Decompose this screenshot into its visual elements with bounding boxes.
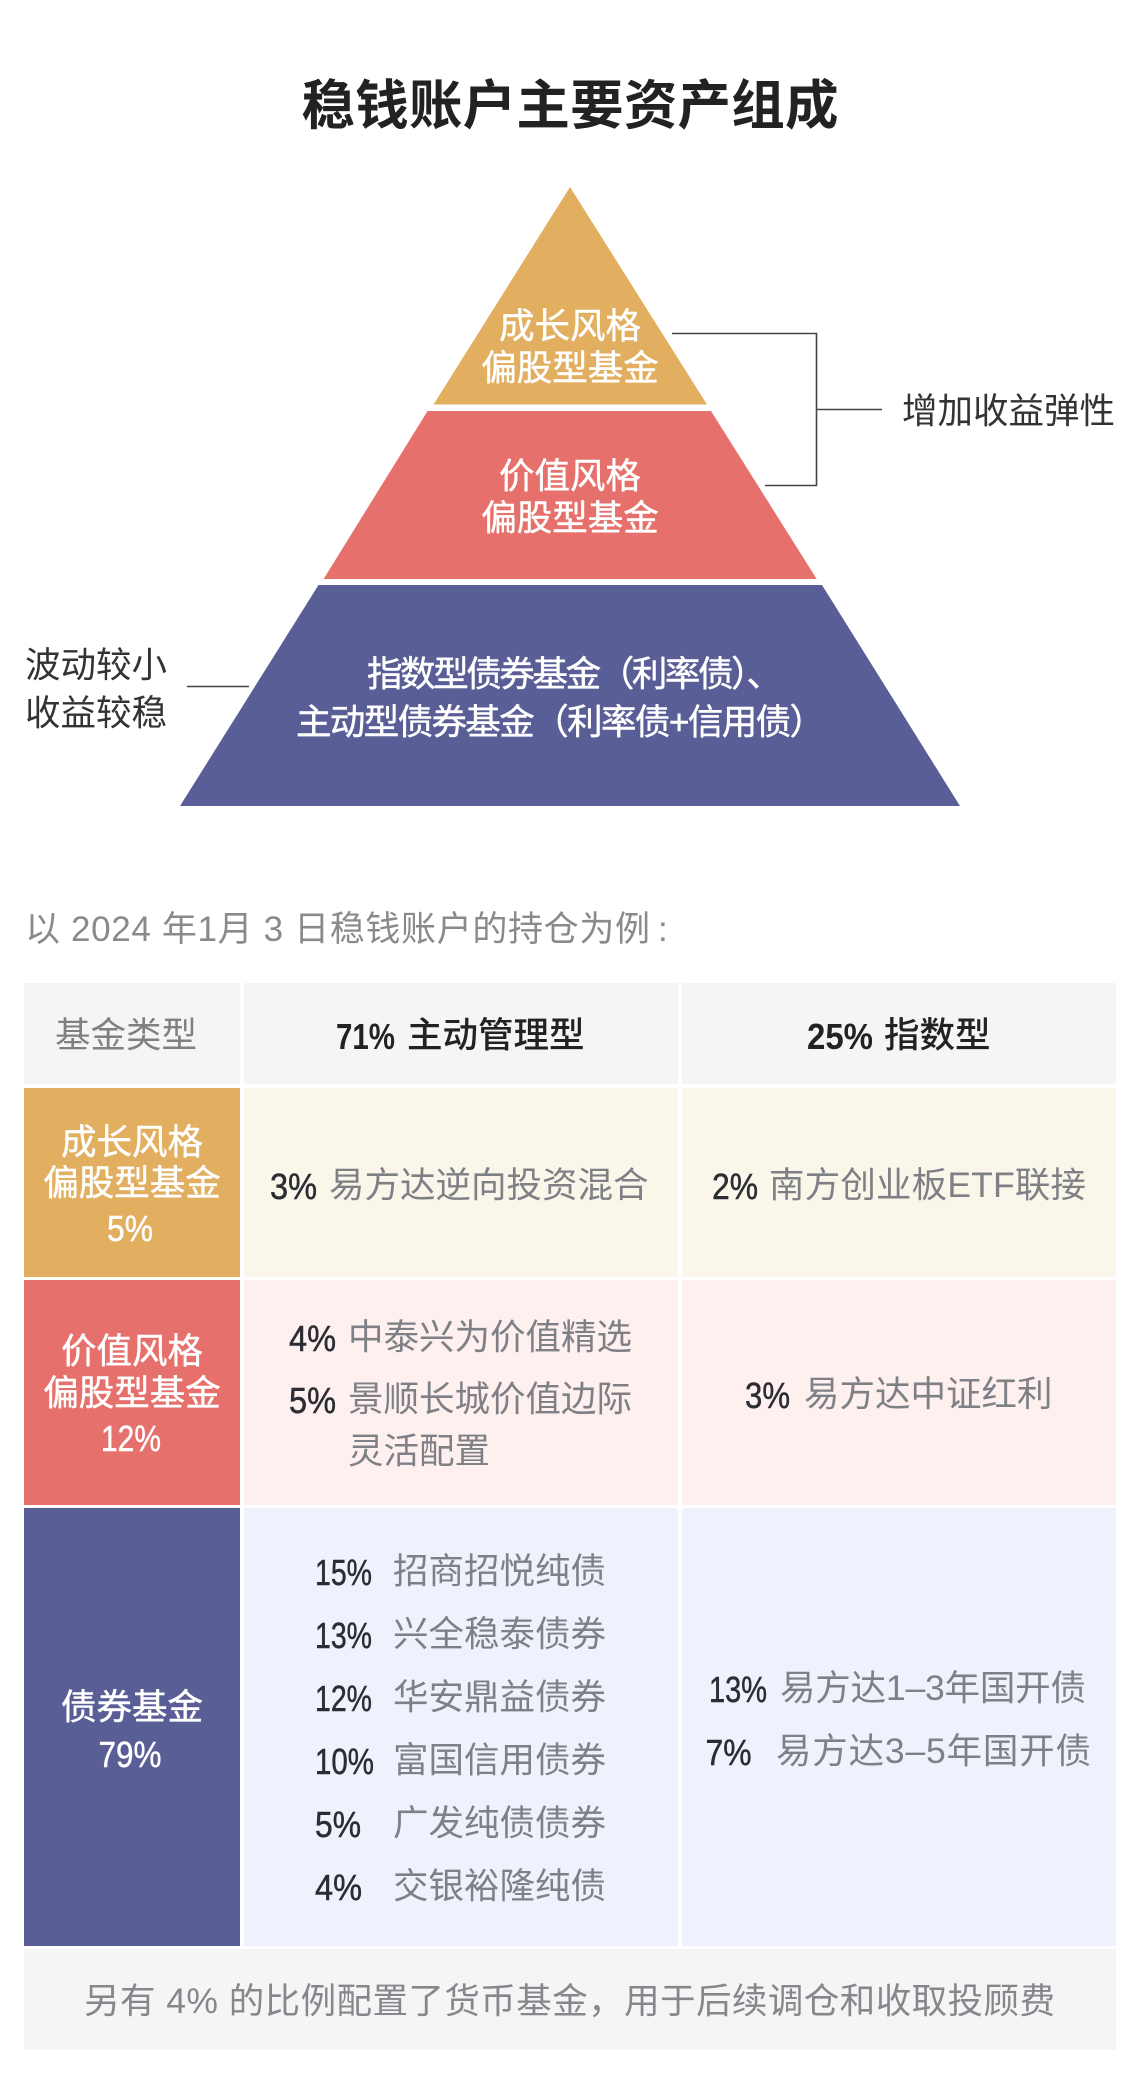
title: 稳钱账户主要资产组成 (302, 77, 838, 136)
row: value equity funds: 灵活配置 (348, 1431, 490, 1471)
row: value equity funds: 偏股型基金 (43, 1373, 221, 1413)
holdings table (24, 983, 1116, 2050)
callout: adds return elasticity (672, 334, 1115, 486)
pyramid chart (180, 187, 960, 806)
pyramid tier: growth equity funds: 成长风格 (499, 306, 641, 346)
row: bond funds: 易方达1–3年国开债 (780, 1668, 1086, 1708)
row: bond funds: 7% (706, 1732, 752, 1773)
row: growth equity funds: 偏股型基金 (43, 1163, 221, 1203)
row: bond funds: 广发纯债债券 (393, 1803, 606, 1843)
row: value equity funds: 12% (101, 1418, 161, 1459)
callout: lower volatility, steadier returns (25, 645, 249, 733)
row: bond funds (24, 1508, 1116, 1946)
callout: adds return elasticity: 增加收益弹性 (902, 391, 1115, 431)
row: value equity funds (24, 1280, 1116, 1505)
pyramid tier: growth equity funds: 偏股型基金 (481, 348, 659, 388)
table header row: 71% (336, 1016, 395, 1057)
callout: lower volatility, steadier returns: 收益较稳 (25, 693, 167, 733)
row: growth equity funds: 成长风格 (61, 1122, 203, 1162)
pyramid tier: growth equity funds (434, 187, 707, 404)
table header row: 基金类型 (55, 1015, 197, 1055)
row: bond funds: 兴全稳泰债券 (393, 1614, 606, 1654)
footer note: 另有 4% 的比例配置了货币基金，用于后续调仓和收取投顾费 (84, 1981, 1055, 2021)
footer note (24, 1949, 1116, 2050)
row: growth equity funds (24, 1088, 1116, 1277)
row: growth equity funds: 3% (270, 1166, 317, 1207)
row: bond funds: 13% (315, 1615, 372, 1656)
row: bond funds: 易方达3–5年国开债 (776, 1731, 1091, 1771)
table header row (24, 983, 1116, 1084)
table header row: 25% (807, 1016, 873, 1057)
row: bond funds: 华安鼎益债券 (393, 1677, 606, 1717)
row: value equity funds: 3% (745, 1375, 790, 1416)
subtitle: 以 2024 年1月 3 日稳钱账户的持仓为例 (25, 910, 650, 949)
row: bond funds: 招商招悦纯债 (393, 1551, 606, 1591)
row: bond funds: 12% (315, 1678, 372, 1719)
row: value equity funds: 5% (289, 1380, 336, 1421)
row: bond funds: 交银裕隆纯债 (393, 1866, 606, 1906)
pyramid tier: value equity funds (324, 411, 817, 579)
row: value equity funds: 景顺长城价值边际 (348, 1379, 632, 1419)
subtitle: : (658, 910, 668, 949)
row: bond funds: 79% (98, 1734, 162, 1775)
pyramid tier: bond funds: 指数型债券基金（利率债）、 (367, 654, 782, 694)
row: bond funds: 债券基金 (61, 1687, 203, 1727)
row: growth equity funds: 南方创业板ETF联接 (769, 1165, 1086, 1205)
row: value equity funds: 易方达中证红利 (804, 1374, 1053, 1414)
row: bond funds: 4% (315, 1867, 362, 1908)
row: growth equity funds: 5% (107, 1208, 153, 1249)
pyramid tier: bond funds (180, 585, 960, 806)
row: bond funds: 10% (315, 1741, 374, 1782)
row: growth equity funds: 易方达逆向投资混合 (329, 1165, 649, 1205)
pyramid tier: bond funds: 主动型债券基金（利率债+信用债） (296, 702, 825, 742)
row: growth equity funds: 2% (712, 1166, 758, 1207)
row: bond funds: 13% (709, 1669, 767, 1710)
row: value equity funds: 中泰兴为价值精选 (348, 1317, 632, 1357)
row: value equity funds: 价值风格 (61, 1331, 203, 1371)
row: bond funds: 5% (315, 1804, 361, 1845)
callout: lower volatility, steadier returns: 波动较小 (25, 645, 167, 685)
row: bond funds: 15% (315, 1552, 372, 1593)
pyramid tier: value equity funds: 价值风格 (499, 456, 641, 496)
table header row: 指数型 (884, 1015, 991, 1055)
row: value equity funds: 4% (289, 1318, 336, 1359)
row: bond funds: 富国信用债券 (393, 1740, 606, 1780)
pyramid tier: value equity funds: 偏股型基金 (481, 498, 659, 538)
table header row: 主动管理型 (407, 1015, 585, 1055)
